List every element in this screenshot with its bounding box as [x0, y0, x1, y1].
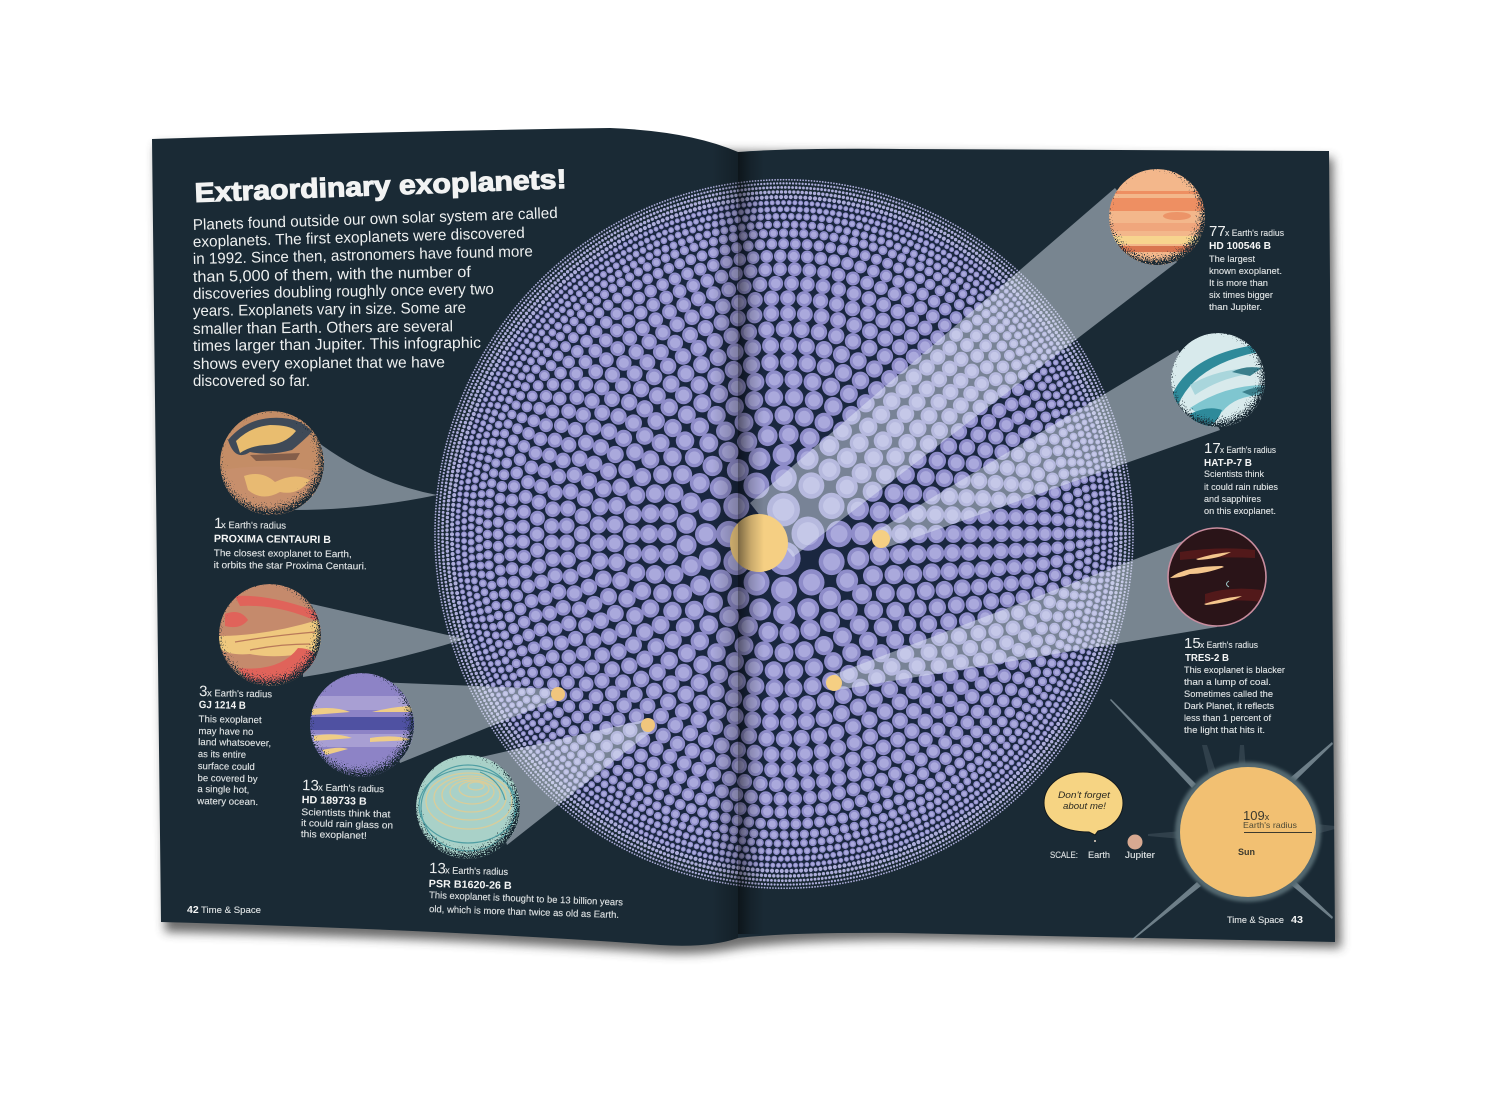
label: TRES-2 b: 15 [1184, 635, 1201, 652]
label: PSR B1620-26 b: old, which is more than twice as old as Earth. [429, 904, 619, 921]
star: PSR B1620-26 host [641, 718, 655, 732]
intro text block: smaller than Earth. Others are several [193, 318, 453, 338]
label: Proxima Centauri b: PROXIMA CENTAURI B [214, 533, 331, 546]
intro text block: shows every exoplanet that we have [193, 354, 445, 373]
label: TRES-2 b: x Earth's radius [1200, 640, 1258, 651]
label: HD 100546 b: 77 [1209, 223, 1226, 240]
label: PSR B1620-26 b: This exoplanet is thought to be 13 billion years [429, 890, 623, 908]
label: Sun radius: Sun [1238, 847, 1255, 857]
label: TRES-2 b: This exoplanet is blacker [1184, 665, 1285, 676]
label: PSR B1620-26 b: 13 [429, 860, 446, 877]
label: Proxima Centauri b: x Earth's radius [221, 520, 286, 532]
beam: PSR B1620-26 b [477, 720, 652, 845]
spine shadow right [738, 152, 764, 934]
beam: HD 100546 b [750, 188, 1177, 557]
planet: GJ 1214 b [218, 584, 322, 686]
intro text block: than 5,000 of them, with the number of [193, 264, 472, 286]
magazine page shadow [156, 145, 1341, 954]
callout: speech bubble [1044, 772, 1123, 835]
callout: speech bubble: about me! [1063, 801, 1107, 811]
label: HD 189733 b: it could rain glass on [301, 818, 393, 832]
scale legend: Earth [1088, 850, 1110, 861]
intro text block: years. Exoplanets vary in size. Some are [193, 300, 466, 320]
label: HAT-P-7 b: 17 [1204, 440, 1221, 457]
label: HD 100546 b: than Jupiter. [1209, 302, 1262, 313]
beam: GJ 1214 b [303, 602, 465, 677]
label: Proxima Centauri b: The closest exoplanet to Earth, [214, 548, 352, 560]
beam: HAT-P-7 b [875, 350, 1220, 548]
label: TRES-2 b: Dark Planet, it reflects [1184, 701, 1274, 712]
beam: Proxima Centauri b [285, 440, 437, 510]
intro text block [193, 205, 558, 390]
label: PSR B1620-26 b: PSR B1620-26 B [429, 878, 512, 892]
label: TRES-2 b [1184, 635, 1285, 736]
scale legend [1050, 834, 1155, 861]
planet: HAT-P-7 b [1171, 333, 1265, 428]
chart: sphere of exoplanet bubbles [435, 180, 1133, 888]
label: Proxima Centauri b [214, 515, 367, 572]
label: GJ 1214 b: GJ 1214 B [199, 699, 246, 712]
label: HAT-P-7 b: on this exoplanet. [1204, 506, 1276, 517]
label: HAT-P-7 b: x Earth's radius [1220, 445, 1276, 456]
intro text block: discoveries doubling roughly once every two [193, 281, 494, 303]
scale legend: Jupiter [1125, 850, 1155, 861]
callout: speech bubble: Don't forget [1058, 790, 1111, 800]
planet: HD 189733 b [308, 673, 416, 777]
label: GJ 1214 b: This exoplanet [198, 714, 262, 726]
label: HD 100546 b: The largest [1209, 254, 1255, 265]
label: GJ 1214 b: 3 [199, 683, 208, 700]
label: HD 189733 b: x Earth's radius [318, 782, 384, 795]
icon: sun rays [1110, 699, 1335, 940]
label: HAT-P-7 b: it could rain rubies [1204, 482, 1278, 493]
label: HAT-P-7 b [1204, 440, 1278, 517]
star: HD 189733 host [551, 687, 565, 701]
intro text block: exoplanets. The first exoplanets were discovered [193, 225, 525, 251]
icon: sun [1175, 762, 1321, 902]
label: GJ 1214 b: as its entire [198, 749, 246, 761]
intro text block: Planets found outside our own solar system are called [193, 205, 558, 234]
intro text block: discovered so far. [193, 373, 310, 390]
label: HD 189733 b: HD 189733 B [302, 794, 367, 808]
planet: HD 100546 b [1105, 169, 1209, 265]
label: GJ 1214 b: land whatsoever, [198, 737, 271, 749]
label: TRES-2 b: than a lump of coal. [1184, 677, 1271, 688]
label: GJ 1214 b: x Earth's radius [207, 688, 272, 700]
star: TRES-2 host [826, 675, 842, 691]
label: HD 189733 b [301, 777, 394, 843]
spine shadow left [716, 146, 738, 940]
planet: TRES-2 b [1168, 528, 1266, 626]
title: Extraordinary exoplanets! [194, 164, 567, 208]
label: HD 100546 b: known exoplanet. [1209, 266, 1282, 277]
label: HD 189733 b: Scientists think that [301, 807, 391, 820]
label: TRES-2 b: less than 1 percent of [1184, 713, 1271, 724]
footer: right page number: 43 [1291, 914, 1303, 926]
label: TRES-2 b: Sometimes called the [1184, 689, 1273, 700]
panel: left page [152, 128, 738, 946]
footer: left page number: 42 [187, 904, 199, 916]
panel: right page [738, 149, 1335, 942]
label: HAT-P-7 b: HAT-P-7 B [1204, 457, 1252, 469]
label: HD 100546 b [1209, 223, 1284, 313]
intro text block: times larger than Jupiter. This infographic [193, 335, 481, 355]
label: Proxima Centauri b: it orbits the star Proxima Centauri. [214, 560, 367, 572]
label: HAT-P-7 b: and sapphires [1204, 494, 1261, 505]
star: HAT-P-7 host [872, 530, 890, 548]
label: HD 100546 b: It is more than [1209, 278, 1268, 289]
label: Sun radius: 109x [1243, 808, 1270, 823]
footer: right page number: Time & Space [1227, 915, 1284, 926]
label: HD 189733 b: 13 [302, 777, 319, 794]
label: PSR B1620-26 b [429, 860, 623, 921]
label: Sun radius [1238, 808, 1312, 857]
star: central host star [730, 514, 788, 572]
label: HD 189733 b: this exoplanet! [301, 829, 367, 842]
label: GJ 1214 b: be covered by [197, 773, 258, 785]
planet: PSR B1620-26 b [416, 755, 520, 859]
label: GJ 1214 b [196, 683, 272, 808]
label: GJ 1214 b: watery ocean. [196, 796, 258, 808]
label: HAT-P-7 b: Scientists think [1204, 469, 1264, 480]
label: TRES-2 b: the light that hits it. [1184, 725, 1265, 736]
label: Proxima Centauri b: 1 [214, 515, 222, 532]
planet: Proxima Centauri b [220, 411, 324, 520]
label: GJ 1214 b: a single hot, [197, 784, 249, 796]
label: HD 100546 b: HD 100546 B [1209, 240, 1271, 252]
beam: HD 189733 b [373, 682, 558, 763]
footer: left page number: Time & Space [201, 905, 261, 916]
label: HD 100546 b: x Earth's radius [1225, 228, 1284, 239]
label: PSR B1620-26 b: x Earth's radius [445, 865, 508, 878]
label: HD 100546 b: six times bigger [1209, 290, 1273, 301]
scale legend: SCALE: [1050, 850, 1078, 861]
label: GJ 1214 b: may have no [198, 726, 253, 738]
label: Sun radius: Earth's radius [1243, 820, 1297, 830]
label: GJ 1214 b: surface could [198, 761, 255, 773]
beam: TRES-2 b [830, 541, 1217, 690]
intro text block: in 1992. Since then, astronomers have found more [193, 243, 533, 268]
label: TRES-2 b: TRES-2 B [1185, 652, 1229, 664]
